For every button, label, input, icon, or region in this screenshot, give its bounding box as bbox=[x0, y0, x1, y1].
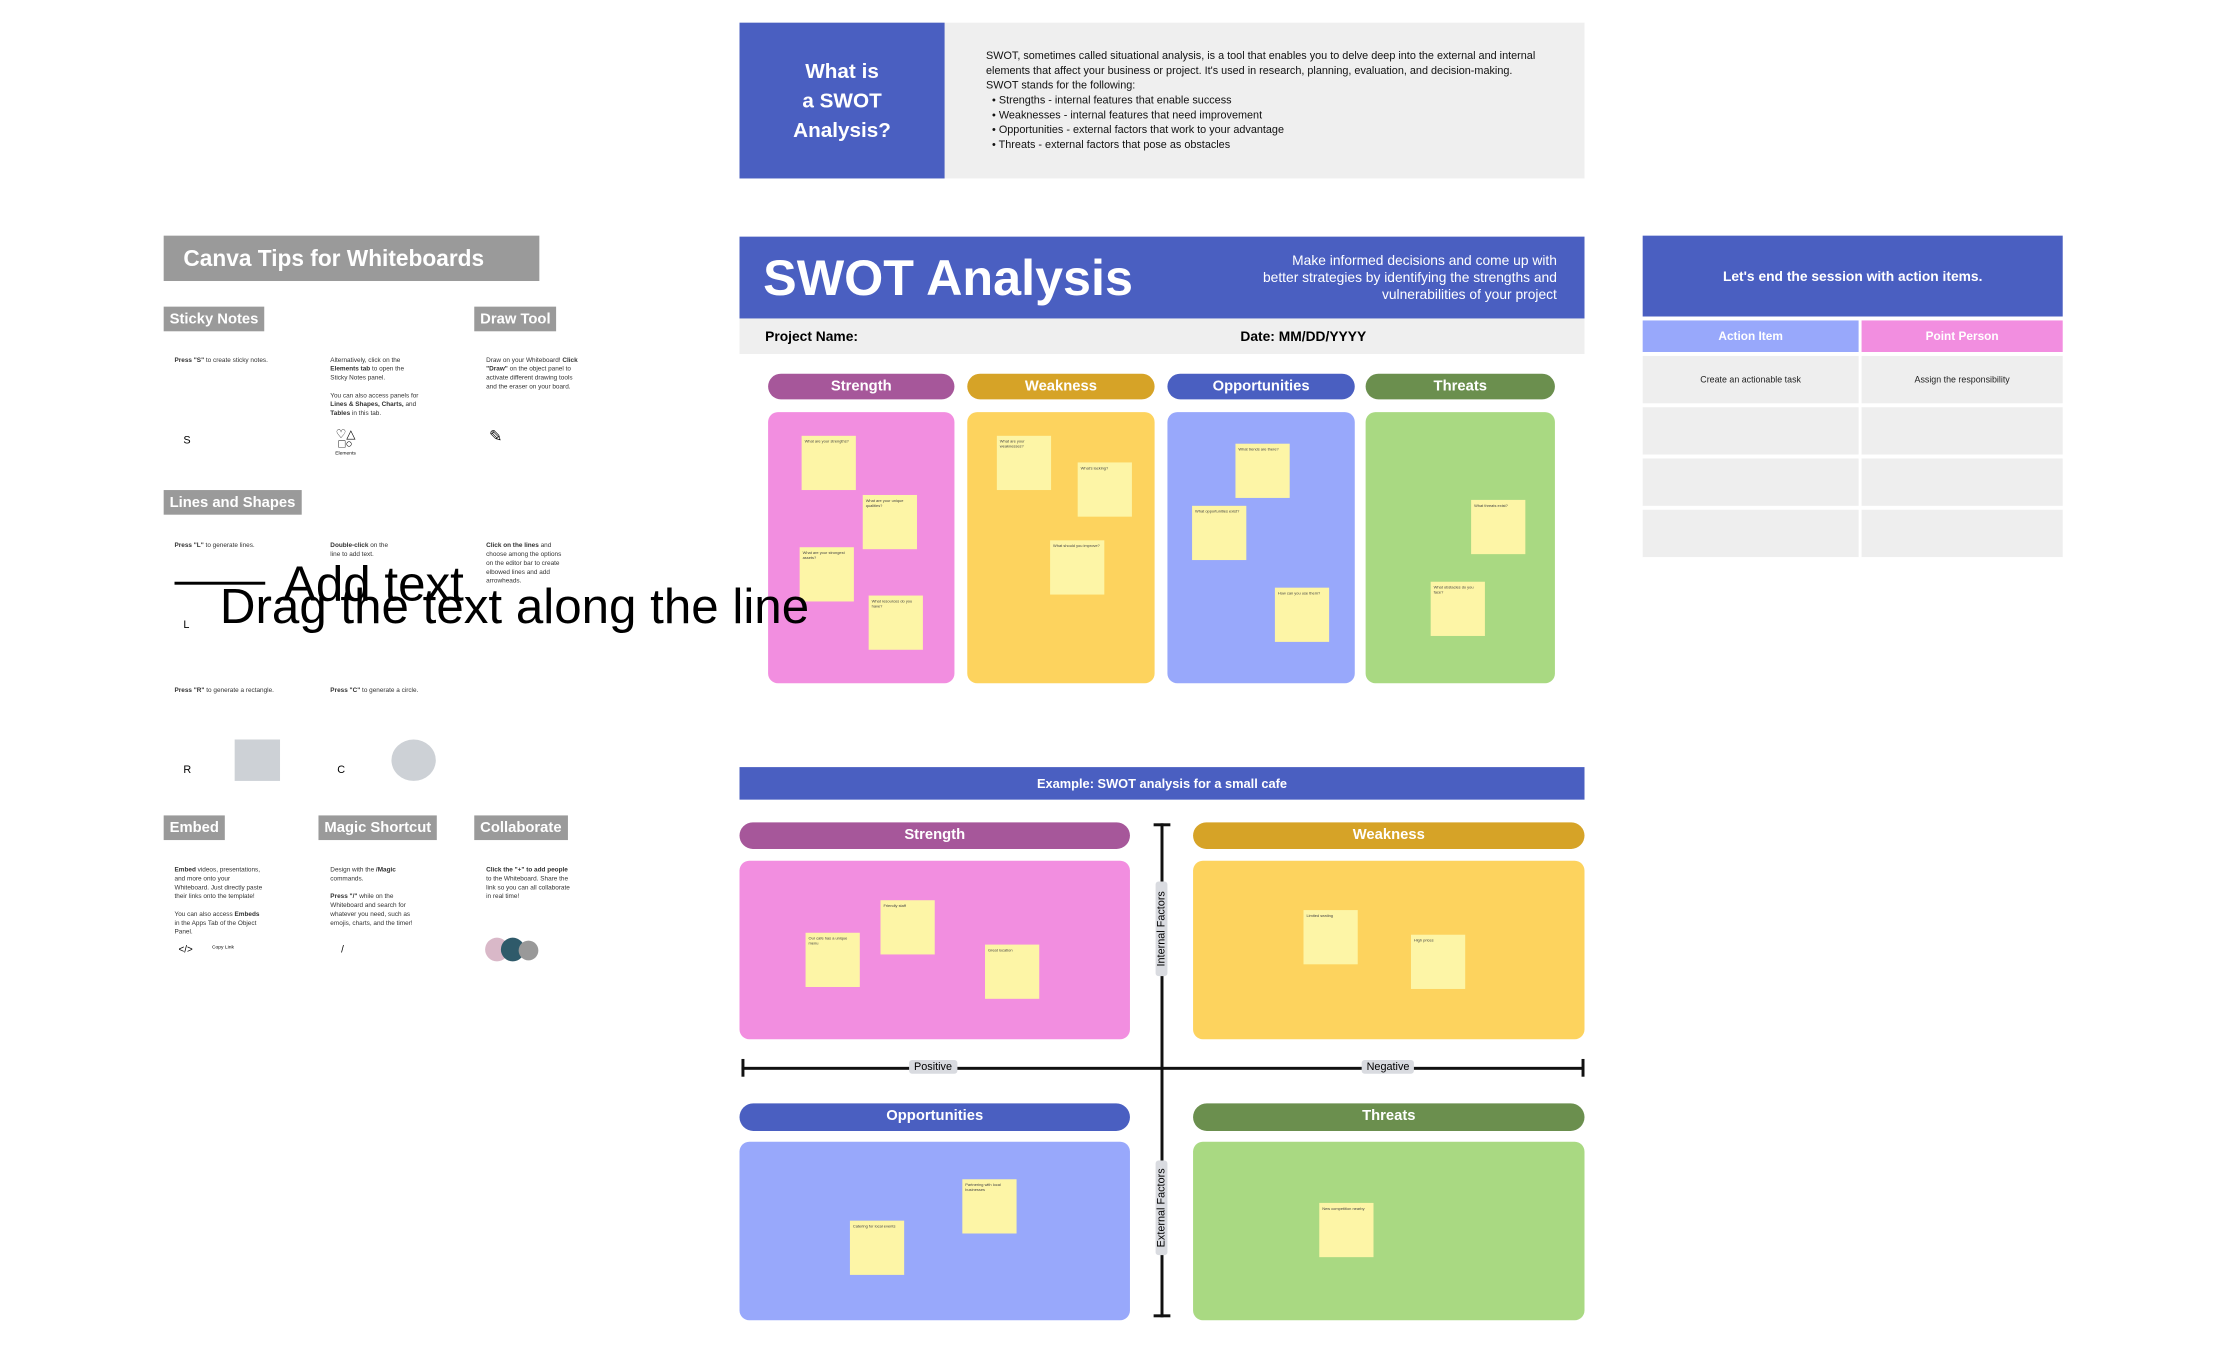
pill: Threats: Threats bbox=[1434, 378, 1487, 394]
panel: threats stickies: What obstacles do you face? bbox=[1434, 585, 1474, 595]
heading: action items bbox=[1643, 236, 2063, 317]
icon: elements: ♡△ bbox=[336, 427, 355, 441]
panel: example threats: New competition nearby bbox=[1322, 1206, 1365, 1211]
text: R bbox=[183, 764, 191, 776]
axis: horizontal positive/negative bbox=[741, 1067, 1585, 1070]
text: Press "R" to generate a rectangle. bbox=[175, 687, 274, 694]
icon: collaborator avatars bbox=[485, 938, 538, 962]
label: magic shortcut: Magic Shortcut bbox=[324, 819, 431, 836]
panel: action items: Point Person bbox=[1926, 329, 1999, 343]
pill: example strength bbox=[740, 822, 1130, 849]
icon: elements: Elements bbox=[335, 451, 356, 457]
icon: elements: □○ bbox=[338, 437, 353, 451]
heading: what is a SWOT analysis: Analysis? bbox=[793, 119, 891, 142]
label: collaborate: Collaborate bbox=[480, 819, 562, 836]
shape: rectangle bbox=[235, 740, 280, 781]
label: draw tool: Draw Tool bbox=[480, 311, 551, 327]
label: positive bbox=[909, 1060, 957, 1074]
heading: what is a SWOT analysis: What is bbox=[805, 60, 879, 83]
text: Copy Link bbox=[212, 945, 234, 951]
panel: action items: Create an actionable task bbox=[1700, 375, 1801, 385]
panel: opportunities stickies bbox=[1167, 412, 1355, 683]
title: Canva tips bbox=[164, 236, 539, 281]
pill: Threats bbox=[1366, 374, 1555, 399]
shape: circle bbox=[391, 740, 436, 781]
text: / bbox=[341, 945, 344, 955]
panel: threats stickies: What threats exist? bbox=[1474, 503, 1508, 508]
axis: vertical internal/external bbox=[1161, 823, 1163, 1317]
label: internal factors: Internal Factors bbox=[1156, 891, 1167, 966]
label: collaborate bbox=[474, 815, 567, 840]
text block: SWOT definition bbox=[986, 50, 1535, 151]
text: Press "/" while on the Whiteboard and search for whatever you need, such as emojis, charts, and the timer! bbox=[330, 893, 413, 927]
label: negative: Negative bbox=[1367, 1061, 1409, 1073]
table header bbox=[1643, 320, 1859, 352]
text: C bbox=[337, 764, 345, 776]
text block: SWOT definition: SWOT, sometimes called situational analysis, is a tool that enables you to delve deep into the external and internal elements that affect your business or project. It's used in research, planning, evaluation, and decision-making. bbox=[986, 50, 1535, 77]
label: sticky notes bbox=[164, 307, 264, 331]
panel: weakness stickies: What should you improve? bbox=[1053, 543, 1100, 548]
panel: example weakness: Limited seating bbox=[1306, 913, 1333, 918]
panel: action items bbox=[1642, 236, 2063, 557]
panel: example strength: Friendly staff bbox=[883, 903, 906, 908]
label: draw tool bbox=[474, 307, 556, 331]
panel: example strength: Our cafe has a unique menu bbox=[809, 936, 847, 946]
panel: weakness stickies: What are your weaknesses? bbox=[1000, 439, 1025, 449]
text: Press "C" to generate a circle. bbox=[330, 687, 418, 694]
panel: example strength bbox=[740, 861, 1130, 1039]
text: S bbox=[183, 435, 191, 447]
text: Click the "+" to add people to the Whiteboard. Share the link so you can all collaborate in real time! bbox=[486, 867, 570, 900]
line sample bbox=[175, 582, 265, 585]
label: sticky notes: Sticky Notes bbox=[170, 311, 258, 327]
panel: opportunities stickies: How can you use them? bbox=[1278, 591, 1320, 596]
icon: draw pencil: ✎ bbox=[489, 429, 502, 446]
panel: what is SWOT bbox=[740, 23, 1585, 178]
heading: action items: Let's end the session with action items. bbox=[1723, 268, 1982, 284]
text: Design with the /Magic commands. bbox=[330, 867, 396, 882]
project name bar: Date: MM/DD/YYYY bbox=[1240, 328, 1366, 344]
text: You can also access Embeds in the Apps Tab of the Object Panel. bbox=[175, 911, 259, 936]
text block: SWOT definition: SWOT stands for the following: bbox=[986, 80, 1135, 92]
title: SWOT Analysis header: SWOT Analysis bbox=[763, 249, 1133, 306]
heading: what is a SWOT analysis: a SWOT bbox=[802, 90, 882, 112]
panel: strength stickies: What are your strongest assets? bbox=[803, 550, 845, 560]
label: external factors: External Factors bbox=[1156, 1168, 1167, 1247]
text: </> bbox=[178, 945, 193, 955]
pill: Strength: Strength bbox=[831, 378, 892, 394]
text block: SWOT definition: • Strengths - internal features that enable success bbox=[992, 95, 1232, 106]
panel: opportunities stickies: What opportunities exist? bbox=[1195, 509, 1239, 514]
panel: strength stickies bbox=[768, 412, 954, 683]
pill: Strength bbox=[768, 374, 954, 399]
heading: example bar bbox=[740, 767, 1585, 800]
pill: example weakness: Weakness bbox=[1353, 826, 1425, 843]
panel: example weakness bbox=[1193, 861, 1585, 1039]
text: Double-click on the line to add text. bbox=[330, 542, 388, 558]
panel: threats stickies bbox=[1366, 412, 1555, 683]
pill: example opportunities bbox=[740, 1103, 1130, 1131]
panel: strength stickies: What resources do you have? bbox=[872, 599, 912, 608]
pill: example threats: Threats bbox=[1362, 1107, 1415, 1124]
pill: example threats bbox=[1193, 1103, 1585, 1131]
text: You can also access panels for Lines & Shapes, Charts, and Tables in this tab. bbox=[330, 392, 418, 417]
text: sticky tips: Press "S" to create sticky notes. bbox=[175, 357, 268, 364]
text block: SWOT definition: • Threats - external factors that pose as obstacles bbox=[992, 139, 1230, 151]
pill: example strength: Strength bbox=[904, 826, 965, 843]
pill: Opportunities: Opportunities bbox=[1213, 378, 1310, 394]
panel: example opportunities: Catering for local events bbox=[853, 1224, 895, 1229]
label: negative bbox=[1362, 1060, 1414, 1074]
label: lines and shapes bbox=[164, 490, 301, 515]
label: lines and shapes: Lines and Shapes bbox=[170, 494, 295, 511]
text: L bbox=[183, 619, 189, 631]
project name bar bbox=[740, 318, 1585, 354]
panel: action items: Assign the responsibility bbox=[1915, 375, 2010, 385]
pill: example opportunities: Opportunities bbox=[886, 1107, 983, 1124]
heading: what is a SWOT analysis bbox=[740, 23, 945, 178]
text: Embed videos, presentations, and more onto your Whiteboard. Just directly paste their links onto the template! bbox=[175, 867, 262, 900]
panel: example weakness: High prices bbox=[1414, 938, 1434, 943]
panel: strength stickies: What are your strengths? bbox=[805, 439, 849, 444]
text: Click on the lines and choose among the options on the editor bar to create elbowed lines and add arrowheads. bbox=[486, 542, 561, 585]
text: Alternatively, click on the Elements tab to open the Sticky Notes panel. bbox=[330, 357, 404, 382]
title: SWOT Analysis header bbox=[740, 237, 1585, 318]
panel: weakness stickies: What's lacking? bbox=[1081, 465, 1108, 470]
panel: example opportunities: Partnering with local businesses bbox=[965, 1182, 1001, 1192]
title: Canva tips: Canva Tips for Whiteboards bbox=[183, 246, 484, 271]
panel: opportunities stickies: What trends are there? bbox=[1238, 447, 1279, 452]
panel: example threats bbox=[1193, 1142, 1585, 1320]
text block: header subtitle: Make informed decisions and come up with better strategies by identifying the strengths and vulnerabilities of your project bbox=[1263, 252, 1557, 302]
pill: example weakness bbox=[1193, 822, 1585, 849]
label: embed: Embed bbox=[170, 819, 219, 836]
text block: SWOT definition: • Weaknesses - internal features that need improvement bbox=[992, 109, 1262, 121]
label: magic shortcut bbox=[318, 815, 437, 840]
heading: example bar: Example: SWOT analysis for a small cafe bbox=[1037, 776, 1287, 791]
icon: elements bbox=[335, 427, 356, 457]
label: embed bbox=[164, 815, 225, 840]
pill: Weakness: Weakness bbox=[1025, 378, 1097, 394]
text: Draw on your Whiteboard! Click "Draw" on the object panel to activate different drawing tools and the eraser on your board. bbox=[486, 357, 578, 390]
panel: example strength: Great location bbox=[988, 948, 1013, 952]
text: drag the text along the line: Drag the text along the line bbox=[220, 579, 809, 634]
label: positive: Positive bbox=[914, 1061, 952, 1073]
text: Press "L" to generate lines. bbox=[175, 542, 255, 549]
panel: weakness stickies bbox=[967, 412, 1155, 683]
project name bar: Project Name: bbox=[765, 328, 858, 344]
text block: SWOT definition: • Opportunities - external factors that work to your advantage bbox=[992, 124, 1284, 136]
pill: Opportunities bbox=[1167, 374, 1355, 399]
table header: Action Item bbox=[1718, 329, 1783, 343]
panel: strength stickies: What are your unique qualities? bbox=[866, 498, 903, 508]
panel: example opportunities bbox=[740, 1142, 1130, 1320]
text: add text: Add text bbox=[283, 556, 464, 611]
pill: Weakness bbox=[967, 374, 1155, 399]
